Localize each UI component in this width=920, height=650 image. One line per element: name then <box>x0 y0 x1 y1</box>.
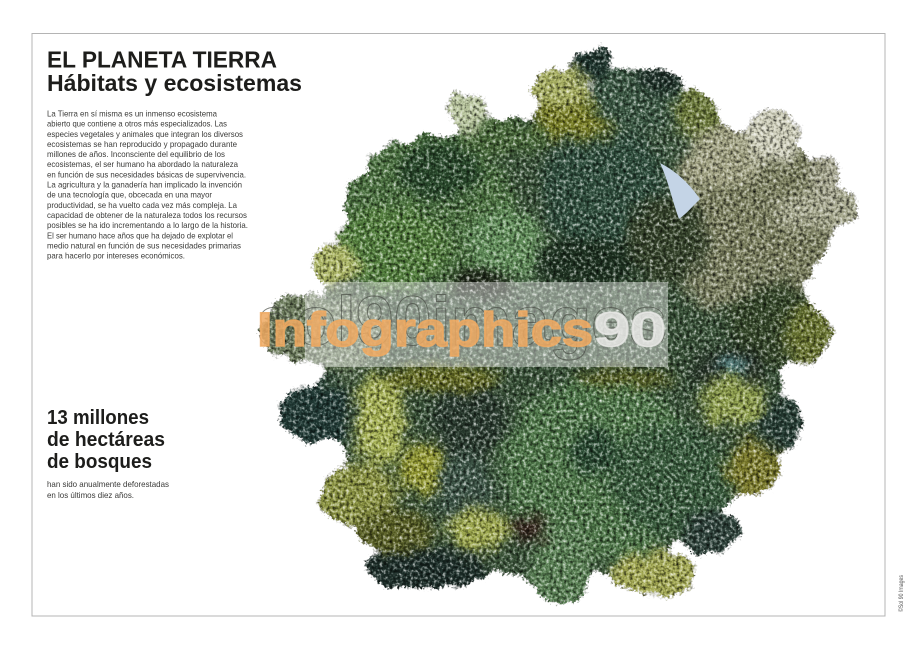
intro text block: productividad, se ha vuelto cada vez más compleja. La <box>47 201 237 210</box>
intro text block <box>47 110 248 261</box>
forest planet illustration <box>262 48 862 607</box>
intro text block: posibles se ha ido incrementando a lo largo de la historia. <box>47 221 248 230</box>
intro text block: capacidad de obtener de la naturaleza todos los recursos <box>47 211 247 220</box>
intro text block: La Tierra en sí misma es un inmenso ecosistema <box>47 110 217 118</box>
statistic: deforested hectares: en los últimos diez años. <box>47 491 134 500</box>
canopy: gap fillers on top and left <box>644 107 716 163</box>
planet base <box>322 115 784 577</box>
watermark: outlined logo: sol90images <box>257 282 667 360</box>
canopy: upper-left green <box>347 136 517 288</box>
canopy: top dark foliage <box>592 68 688 132</box>
title: EL PLANETA TIERRA <box>47 46 277 72</box>
canopy: upper-centre teal <box>543 125 667 255</box>
lake patch right <box>716 356 744 374</box>
canopy: bottom green <box>500 380 700 560</box>
watermark: infographics logo: 90 <box>594 304 666 357</box>
intro text block: ecosistemas, el ser humano ha abordado la naturaleza <box>47 160 238 169</box>
statistic: deforested hectares: han sido anualmente deforestadas <box>47 480 169 489</box>
image credit: ©Sol 90 Images <box>898 575 905 612</box>
watermark band <box>305 282 668 367</box>
intro text block: para hacerlo por intereses económicos. <box>47 252 185 261</box>
ice patch <box>660 163 700 219</box>
intro text block: especies vegetales y animales que integran los diversos <box>47 130 243 139</box>
canopy: right pale tan tree <box>664 133 832 303</box>
intro text block: ecosistemas se han reproducido y propagado durante <box>47 140 237 149</box>
canopy: lower right yellow-green <box>699 376 767 428</box>
title: Hábitats y ecosistemas <box>47 70 302 96</box>
top-left pale bush <box>448 92 488 128</box>
intro text block: millones de años. Inconsciente del equilibrio de los <box>47 150 225 159</box>
statistic: deforested hectares: de bosques <box>47 451 152 473</box>
statistic: deforested hectares: 13 millones <box>47 407 149 429</box>
statistic: deforested hectares: de hectáreas <box>47 429 165 451</box>
canopy: bottom olive <box>613 552 697 596</box>
canopy: right dark edge <box>730 283 814 367</box>
intro text block: de una tecnología que, obcecada en una mayor <box>47 191 212 200</box>
intro text block: medio natural en función de sus necesidades primarias <box>47 241 241 250</box>
intro text block: abierto que contiene a otros más especializados. Las <box>47 120 227 129</box>
intro text block: en función de sus necesidades básicas de supervivencia. <box>47 170 246 179</box>
canopy: top olive <box>536 100 620 140</box>
watermark: infographics logo: Infographics <box>257 304 593 357</box>
title <box>47 46 302 96</box>
canopy: left teal and olive <box>278 382 366 442</box>
intro text block: El ser humano hace años que ha dejado de explotar el <box>47 231 233 240</box>
statistic: deforested hectares <box>47 407 169 500</box>
intro text block: La agricultura y la ganadería han implicado la invención <box>47 180 242 190</box>
